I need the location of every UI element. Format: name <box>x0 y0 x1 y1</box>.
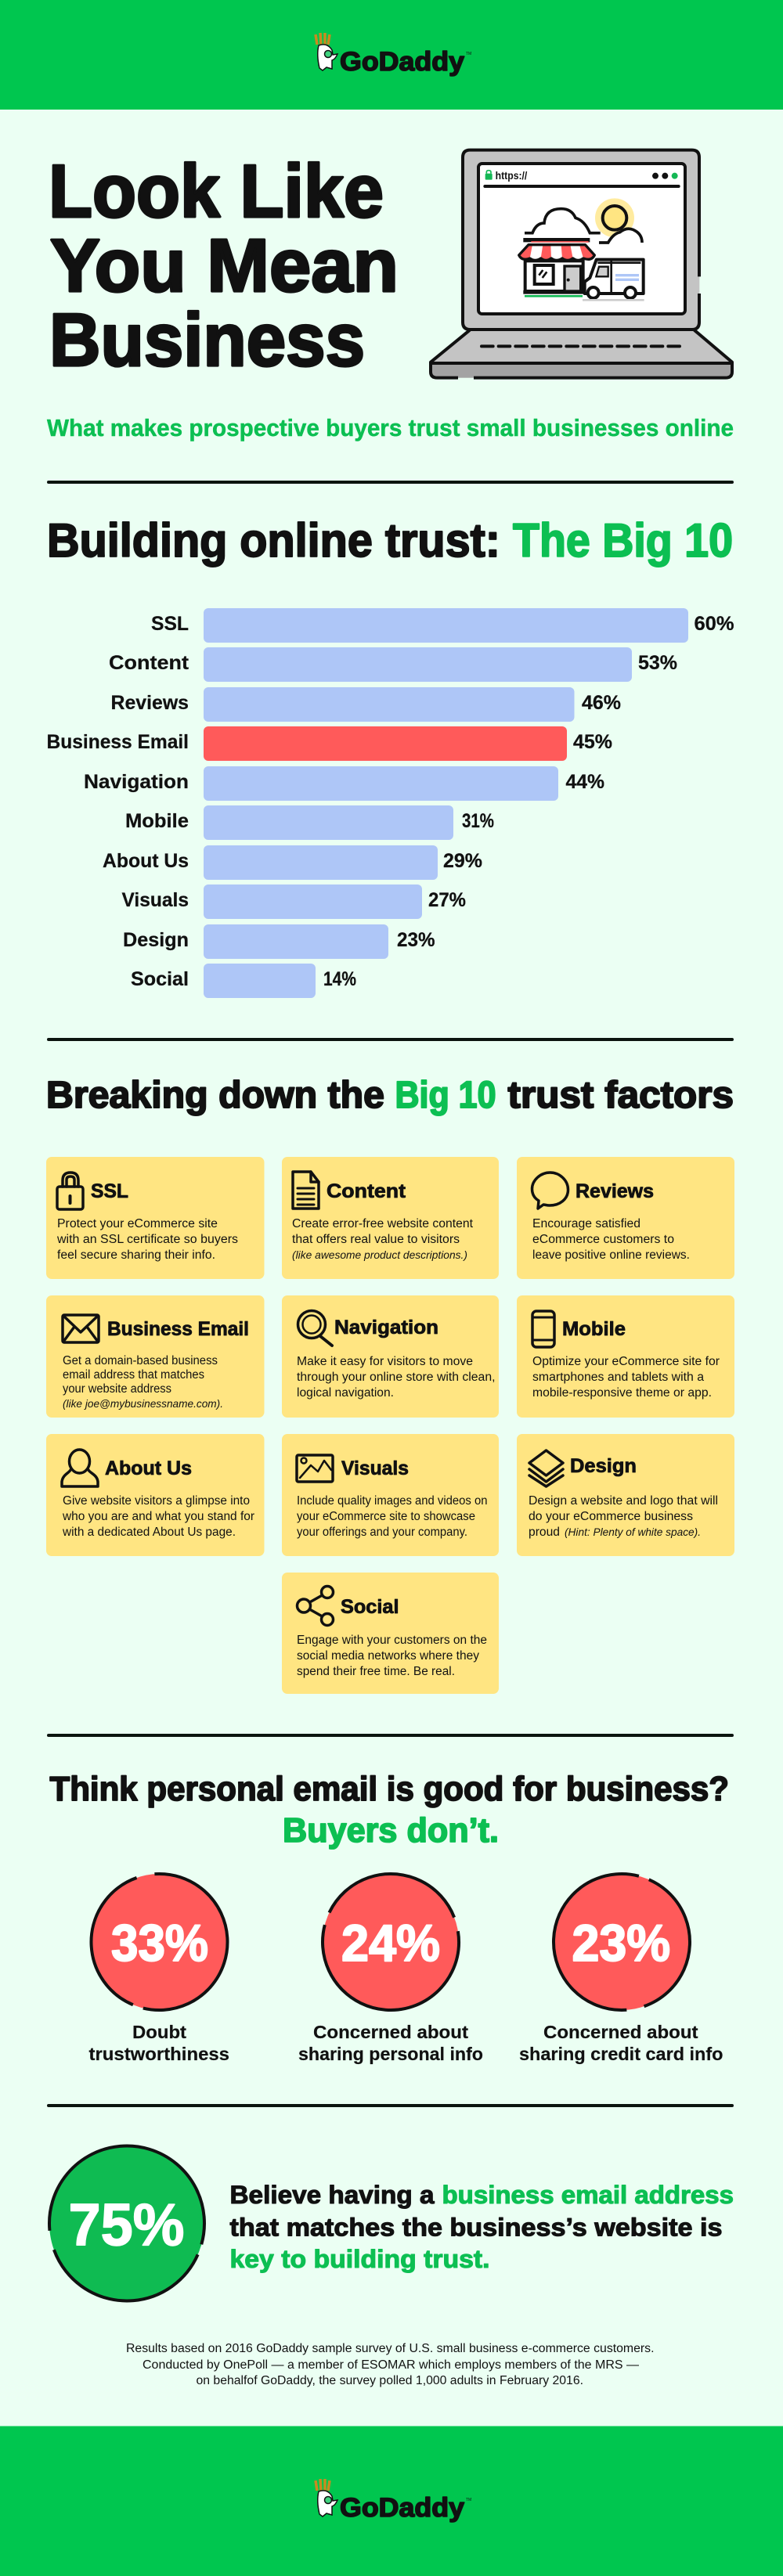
card: Navigation: Navigation <box>334 1317 438 1338</box>
logo: GoDaddy: GoDaddy <box>340 47 464 77</box>
footnote: on behalfof GoDaddy, the survey polled 1,000 adults in February 2016. <box>196 2374 583 2387</box>
description: SSL: Protect your eCommerce site <box>57 1217 218 1230</box>
stat: 33%: 33% <box>111 1914 208 1972</box>
description: About Us: who you are and what you stand for <box>62 1510 254 1523</box>
description: SSL <box>56 1217 238 1262</box>
bar: About Us <box>103 845 482 880</box>
bar: Navigation <box>84 766 604 801</box>
icon: share nodes <box>298 1586 334 1625</box>
laptop screen frame <box>463 150 699 330</box>
card: Navigation <box>282 1295 499 1418</box>
description: Reviews: Encourage satisfied <box>532 1217 640 1230</box>
description: Navigation <box>297 1355 495 1400</box>
bar: Reviews <box>111 687 621 722</box>
stat: 33% <box>87 1870 232 2064</box>
description: Content <box>292 1217 474 1261</box>
card: Design: Design <box>570 1455 637 1477</box>
header band <box>0 0 783 110</box>
bar: Navigation: Navigation <box>84 771 189 793</box>
callout: business email key to trust <box>230 2181 734 2273</box>
description: Content: (like awesome product descriptions.) <box>292 1248 467 1261</box>
stat: 24%: Concerned about <box>313 2022 468 2042</box>
bar: Content: 53% <box>638 652 677 674</box>
card: SSL <box>46 1157 265 1279</box>
description: Mobile: smartphones and tablets with a <box>532 1371 704 1384</box>
bar: Content <box>109 647 677 682</box>
bar: Mobile: Mobile <box>125 810 189 832</box>
description: Content: that offers real value to visitors <box>292 1233 460 1246</box>
clouds <box>525 209 642 243</box>
subtitle: What makes prospective buyers trust small businesses online <box>47 414 734 441</box>
title: Look Like <box>49 150 384 233</box>
laptop base <box>431 330 732 378</box>
footer logo: GoDaddy: TM <box>466 2498 471 2502</box>
stat: 75%: 75% <box>69 2192 185 2259</box>
bar: Visuals <box>122 884 466 919</box>
description: Design: proud <box>529 1526 560 1539</box>
callout: business email key to trust: Believe having a <box>230 2181 435 2209</box>
description: Reviews <box>532 1217 690 1262</box>
stat: 33%: trustworthiness <box>89 2044 229 2064</box>
stat: 33%: Doubt <box>132 2022 186 2042</box>
sun <box>595 198 634 237</box>
heading: Building online trust <box>47 514 733 567</box>
bar: Business Email <box>47 726 612 761</box>
bar: Content: Content <box>109 652 189 674</box>
card: Mobile <box>517 1295 734 1418</box>
card: Visuals: Visuals <box>341 1457 409 1479</box>
stat: 24%: sharing personal info <box>298 2044 483 2064</box>
icon: picture <box>297 1455 333 1482</box>
description: Content: Create error-free website content <box>292 1217 474 1230</box>
icon: magnifying glass <box>298 1310 332 1346</box>
description: Business Email <box>63 1354 223 1410</box>
heading: Building online trust: Building online trust: <box>47 514 500 567</box>
card: About Us <box>46 1434 265 1556</box>
description: Visuals: your eCommerce site to showcase <box>297 1510 475 1523</box>
stat: 24% <box>298 1851 483 2064</box>
description: Design: do your eCommerce business <box>529 1510 693 1523</box>
stat: 23%: 23% <box>572 1914 670 1972</box>
illustration: laptop showing online store <box>431 150 732 378</box>
storefront <box>519 240 594 296</box>
icon: person <box>62 1450 98 1486</box>
bar: Design: Design <box>123 929 189 951</box>
description: About Us: Give website visitors a glimpse into <box>63 1494 250 1508</box>
bar: SSL <box>151 608 734 643</box>
description: Navigation: Make it easy for visitors to move <box>297 1355 473 1368</box>
card: Business Email <box>46 1295 265 1418</box>
card: Reviews <box>517 1157 734 1279</box>
logo: GoDaddy: TM <box>466 52 471 56</box>
footer logo: GoDaddy: GoDaddy <box>340 2493 464 2523</box>
description: Design: (Hint: Plenty of white space). <box>565 1526 701 1538</box>
icon: document <box>293 1172 319 1209</box>
description: SSL: with an SSL certificate so buyers <box>56 1233 238 1246</box>
description: Navigation: through your online store with clean, <box>297 1371 495 1384</box>
bar: Visuals: Visuals <box>122 889 189 911</box>
description: Reviews: eCommerce customers to <box>532 1233 674 1246</box>
stat: 75% <box>43 2139 211 2308</box>
bar: Design <box>123 924 435 959</box>
description: Visuals: Include quality images and videos on <box>297 1494 487 1508</box>
bar: About Us: About Us <box>103 850 189 872</box>
card: Content <box>282 1157 499 1279</box>
description: SSL: feel secure sharing their info. <box>57 1248 215 1262</box>
bar: Social: Social <box>131 968 189 990</box>
card: Design <box>517 1434 734 1556</box>
callout: business email key to trust: that matches the business’s website is <box>230 2214 722 2242</box>
description: Business Email: your website address <box>63 1382 171 1396</box>
footnote <box>126 2342 655 2387</box>
card: Content: Content <box>327 1180 406 1202</box>
icon: speech bubble <box>532 1173 568 1209</box>
description: Social: Engage with your customers on the <box>297 1634 487 1647</box>
description: Mobile: Optimize your eCommerce site for <box>532 1355 720 1368</box>
bar: Design: 23% <box>397 929 435 951</box>
bar: Mobile: 31% <box>462 810 494 832</box>
bar: SSL: 60% <box>694 613 734 635</box>
card: Social: Social <box>341 1596 399 1618</box>
footnote: Results based on 2016 GoDaddy sample survey of U.S. small business e-commerce customers. <box>126 2342 655 2355</box>
description: Design <box>529 1494 718 1539</box>
description: Social: social media networks where they <box>297 1649 479 1663</box>
bar: Social <box>131 964 356 998</box>
bar: Reviews: Reviews <box>111 692 189 714</box>
heading: personal email <box>50 1770 729 1850</box>
description: Navigation: logical navigation. <box>297 1386 394 1400</box>
title: Business <box>49 298 365 382</box>
bar: SSL: SSL <box>151 613 189 635</box>
icon: smartphone <box>532 1311 554 1347</box>
description: Mobile <box>532 1355 720 1400</box>
bar: Visuals: 27% <box>428 889 466 911</box>
heading: Building online trust: The Big 10 <box>513 514 733 567</box>
card: Social <box>282 1573 499 1694</box>
description: Visuals: your offerings and your company. <box>297 1526 467 1539</box>
description: Business Email: (like joe@mybusinessname.com). <box>63 1397 223 1410</box>
icon: envelope <box>63 1315 99 1342</box>
description: Business Email: Get a domain-based business <box>63 1354 218 1367</box>
heading: Breaking down the Big 10: trust factors <box>507 1075 734 1116</box>
footer logo: GoDaddy <box>316 2479 471 2523</box>
stat: 23%: Concerned about <box>543 2022 698 2042</box>
heading: personal email: Buyers don’t. <box>283 1811 499 1850</box>
footer band <box>0 2426 783 2576</box>
title <box>49 150 399 382</box>
icon: layers <box>529 1450 563 1486</box>
card: About Us: About Us <box>105 1457 192 1479</box>
description: About Us: with a dedicated About Us page. <box>62 1526 236 1539</box>
bar: Business Email: 45% <box>573 731 612 753</box>
heading: Breaking down the Big 10: Big 10 <box>395 1075 496 1116</box>
heading: Breaking down the Big 10: Breaking down the <box>46 1075 384 1116</box>
description: Business Email: email address that matches <box>63 1368 204 1382</box>
footnote: Conducted by OnePoll — a member of ESOMAR which employs members of the MRS — <box>143 2358 640 2372</box>
stat: 23%: sharing credit card info <box>519 2044 723 2064</box>
description: Reviews: leave positive online reviews. <box>532 1248 690 1262</box>
browser bar: https:// <box>496 169 527 182</box>
description: About Us <box>62 1494 254 1539</box>
description: Visuals <box>297 1494 487 1539</box>
icon: padlock <box>57 1173 83 1209</box>
logo: GoDaddy <box>316 33 471 77</box>
description: Social <box>297 1634 487 1678</box>
callout: business email key to trust: business email address <box>442 2181 734 2209</box>
description: Mobile: mobile-responsive theme or app. <box>532 1386 712 1400</box>
title: You Mean <box>50 224 399 308</box>
bar: Navigation: 44% <box>565 771 604 793</box>
card: Mobile: Mobile <box>562 1318 626 1340</box>
bar chart <box>47 608 734 998</box>
bar: Mobile <box>125 805 494 840</box>
card: SSL: SSL <box>91 1180 128 1202</box>
heading: Breaking down the Big 10 <box>46 1075 734 1116</box>
browser bar <box>485 169 679 186</box>
stat: 23% <box>519 1852 723 2064</box>
bar: Reviews: 46% <box>582 692 621 714</box>
delivery van <box>583 260 644 300</box>
bar: About Us: 29% <box>443 850 482 872</box>
bar: Social: 14% <box>323 968 356 990</box>
description: Social: spend their free time. Be real. <box>297 1665 455 1678</box>
card: Reviews: Reviews <box>576 1180 654 1202</box>
card: Visuals <box>282 1434 499 1556</box>
bar: Business Email: Business Email <box>47 731 189 753</box>
heading: personal email: Think personal email is good for business? <box>50 1770 729 1808</box>
description: Design: Design a website and logo that will <box>529 1494 718 1508</box>
callout: business email key to trust: key to building trust. <box>230 2245 490 2273</box>
stat: 24%: 24% <box>341 1914 440 1972</box>
card: Business Email: Business Email <box>107 1318 249 1340</box>
